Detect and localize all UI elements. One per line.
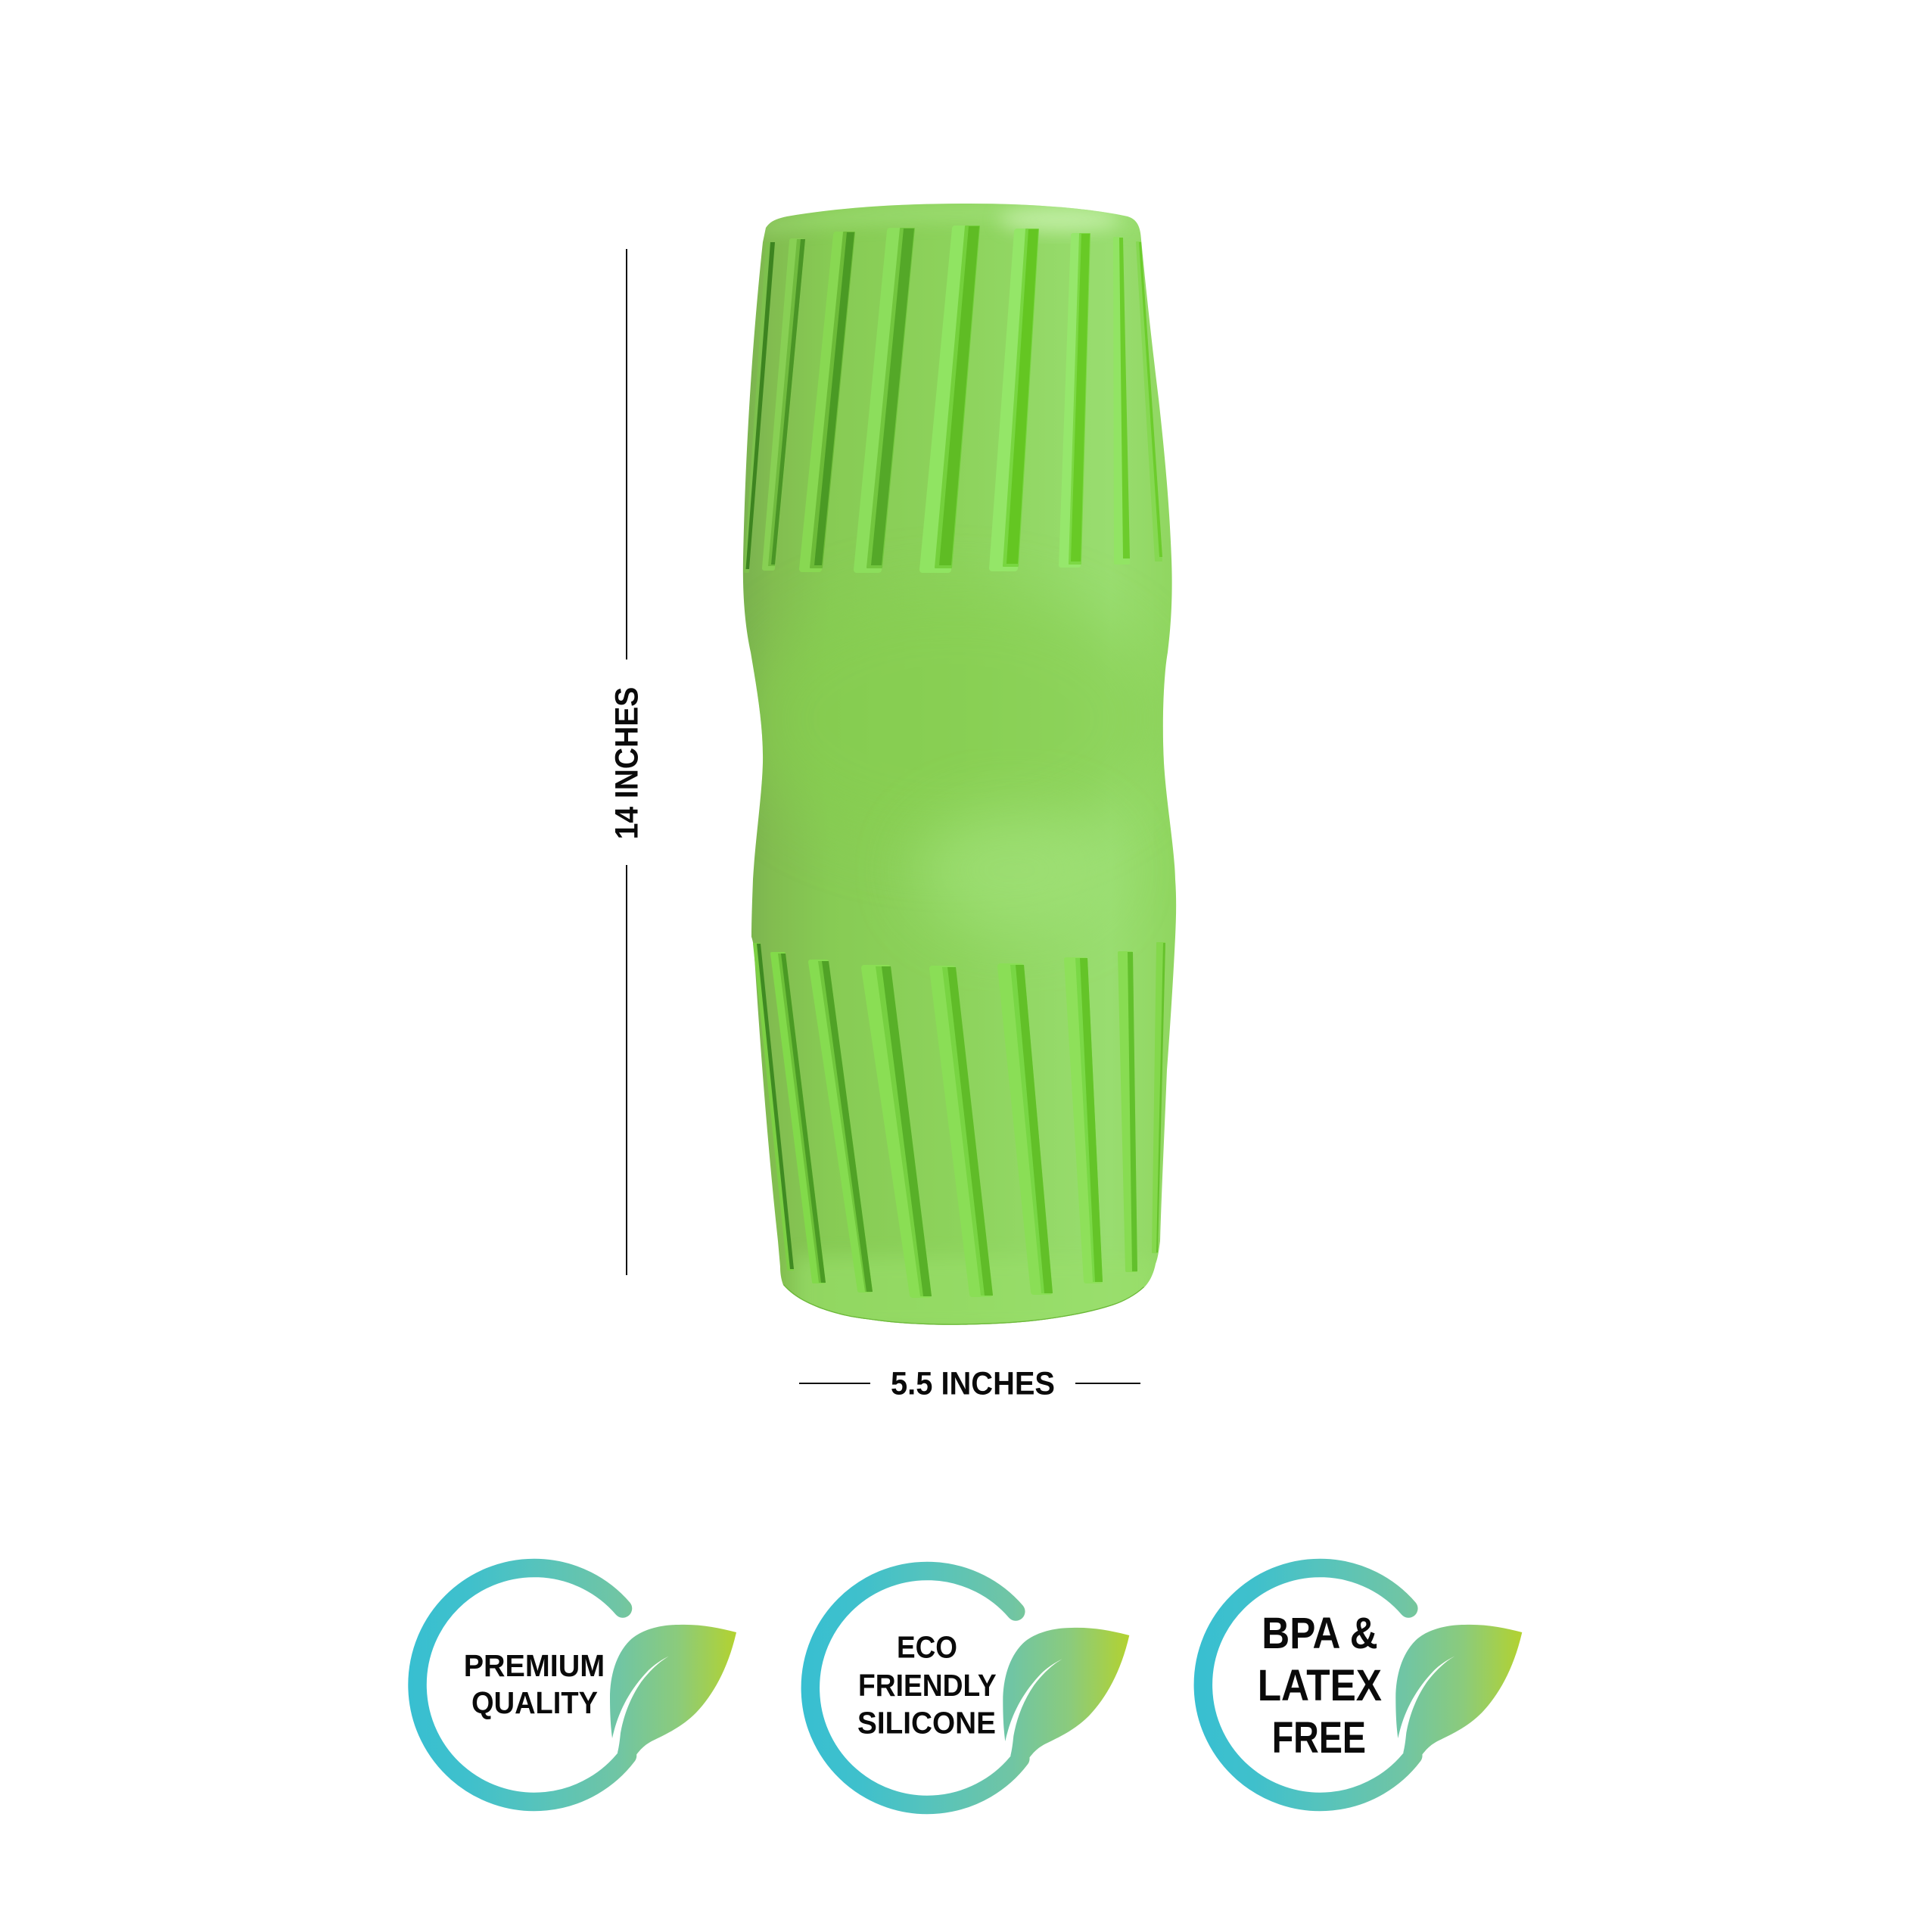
bottom ribs [754,943,1165,1296]
badge: eco friendly silicone [810,1571,1129,1805]
badge: BPA and latex free: LATEX [1258,1661,1382,1710]
badge: premium quality [418,1568,736,1802]
badge: premium quality: PREMIUM [464,1648,605,1683]
top ribs [745,226,1162,571]
badge: BPA and latex free [1203,1568,1522,1802]
badge: eco friendly silicone: FRIENDLY [858,1668,997,1703]
badge: eco friendly silicone: ECO [897,1630,957,1665]
product: green silicone sleeve [734,197,1188,1339]
badge: eco friendly silicone: SILICONE [857,1706,996,1741]
badge: BPA and latex free: FREE [1272,1713,1366,1762]
badge: premium quality: QUALITY [471,1685,598,1720]
height dimension: 14 inches: 14 INCHES [608,687,645,839]
width dimension: 5.5 inches: 5.5 INCHES [891,1367,1055,1402]
badge: BPA and latex free: BPA & [1262,1609,1378,1658]
